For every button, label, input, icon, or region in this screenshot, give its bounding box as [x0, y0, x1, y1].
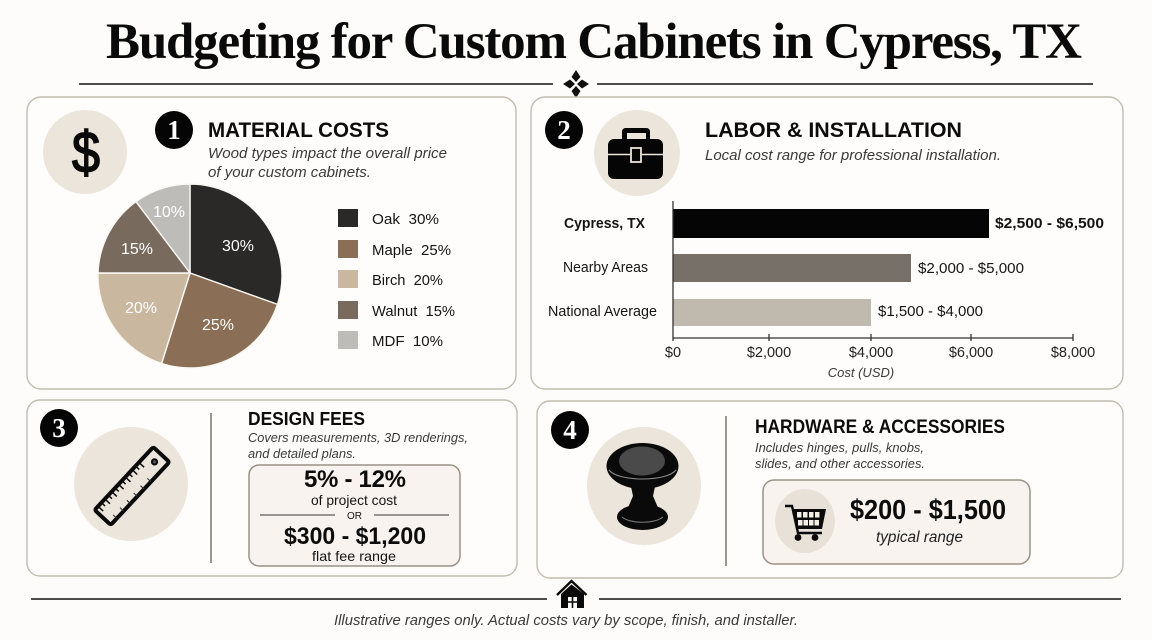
- pie chart: 15%: [121, 241, 153, 258]
- bar chart: $1,500 - $4,000: [878, 304, 983, 320]
- icon: dollar sign: $: [72, 120, 100, 185]
- bar chart: $2,500 - $6,500: [995, 216, 1104, 232]
- legend: [338, 209, 455, 350]
- pie chart: 20%: [125, 300, 157, 317]
- title: Budgeting for Custom Cabinets in Cypress, TX: [106, 14, 1082, 70]
- panel: labor and installation: [531, 97, 1123, 389]
- badge 4: 4: [563, 415, 577, 445]
- icon: diamond ornament: [563, 70, 589, 98]
- panel: design fees: [27, 400, 517, 576]
- legend: Birch 20%: [372, 272, 443, 289]
- footer note: Illustrative ranges only. Actual costs vary by scope, finish, and installer.: [334, 612, 798, 629]
- bar chart: [548, 201, 1104, 380]
- description: design fees: [248, 431, 468, 461]
- callout: design fee ranges: flat fee range: [312, 548, 396, 564]
- description: design fees: and detailed plans.: [248, 447, 356, 461]
- legend: Walnut 15%: [372, 303, 455, 320]
- badge 1: 1: [167, 115, 181, 145]
- description: design fees: Covers measurements, 3D renderings,: [248, 431, 468, 445]
- description: hardware: [755, 441, 925, 471]
- description: material costs: [208, 146, 447, 181]
- bar chart: Cypress, TX: [564, 216, 645, 232]
- legend: MDF 10%: [372, 333, 443, 350]
- bar chart: Cost (USD): [828, 365, 894, 380]
- badge 2: 2: [557, 115, 571, 145]
- icon: briefcase: [594, 110, 680, 196]
- legend: Maple 25%: [372, 242, 451, 259]
- callout: design fee ranges: of project cost: [311, 492, 397, 508]
- description: material costs: of your custom cabinets.: [208, 165, 371, 181]
- callout: design fee ranges: 5% - 12%: [304, 466, 406, 493]
- badge 3: [40, 409, 78, 447]
- bar chart: $4,000: [849, 345, 893, 361]
- bar chart: $2,000: [747, 345, 791, 361]
- description: hardware: slides, and other accessories.: [755, 457, 925, 471]
- badge 3: 3: [52, 413, 66, 443]
- description: labor: Local cost range for professional installation.: [705, 148, 1001, 164]
- bar chart: $2,000 - $5,000: [918, 261, 1024, 277]
- callout: hardware range: $200 - $1,500: [850, 494, 1006, 525]
- heading: design fees: DESIGN FEES: [248, 409, 365, 429]
- bar chart: Nearby Areas: [563, 260, 648, 276]
- bar chart: National Average: [548, 304, 657, 320]
- callout: design fee ranges: OR: [347, 511, 362, 522]
- icon: cabinet knob: [587, 427, 701, 545]
- bar chart: $0: [665, 345, 681, 361]
- badge 2: [545, 111, 583, 149]
- badge 1: [155, 111, 193, 149]
- panel: hardware and accessories: [537, 401, 1123, 578]
- pie chart: 25%: [202, 317, 234, 334]
- callout: design fee ranges: [249, 465, 460, 566]
- legend: Oak 30%: [372, 211, 439, 228]
- pie chart: 30%: [222, 238, 254, 255]
- description: material costs: Wood types impact the overall price: [208, 146, 447, 162]
- pie chart: 10%: [153, 204, 185, 221]
- icon: shopping cart: [775, 489, 835, 553]
- heading: material costs: MATERIAL COSTS: [208, 119, 389, 142]
- icon: dollar sign: [43, 110, 127, 194]
- heading: hardware and accessories: HARDWARE & ACCESSORIES: [755, 417, 1005, 438]
- icon: ruler: [74, 427, 188, 541]
- heading: labor and installation: LABOR & INSTALLATION: [705, 119, 962, 142]
- panel: material costs: [27, 97, 516, 389]
- callout: hardware range: [763, 480, 1030, 564]
- icon: house: [557, 581, 586, 608]
- description: hardware: Includes hinges, pulls, knobs,: [755, 441, 924, 455]
- callout: design fee ranges: $300 - $1,200: [284, 523, 426, 550]
- badge 4: [551, 411, 589, 449]
- pie chart: [98, 184, 282, 368]
- bar chart: $8,000: [1051, 345, 1095, 361]
- bar chart: $6,000: [949, 345, 993, 361]
- callout: hardware range: typical range: [876, 529, 963, 546]
